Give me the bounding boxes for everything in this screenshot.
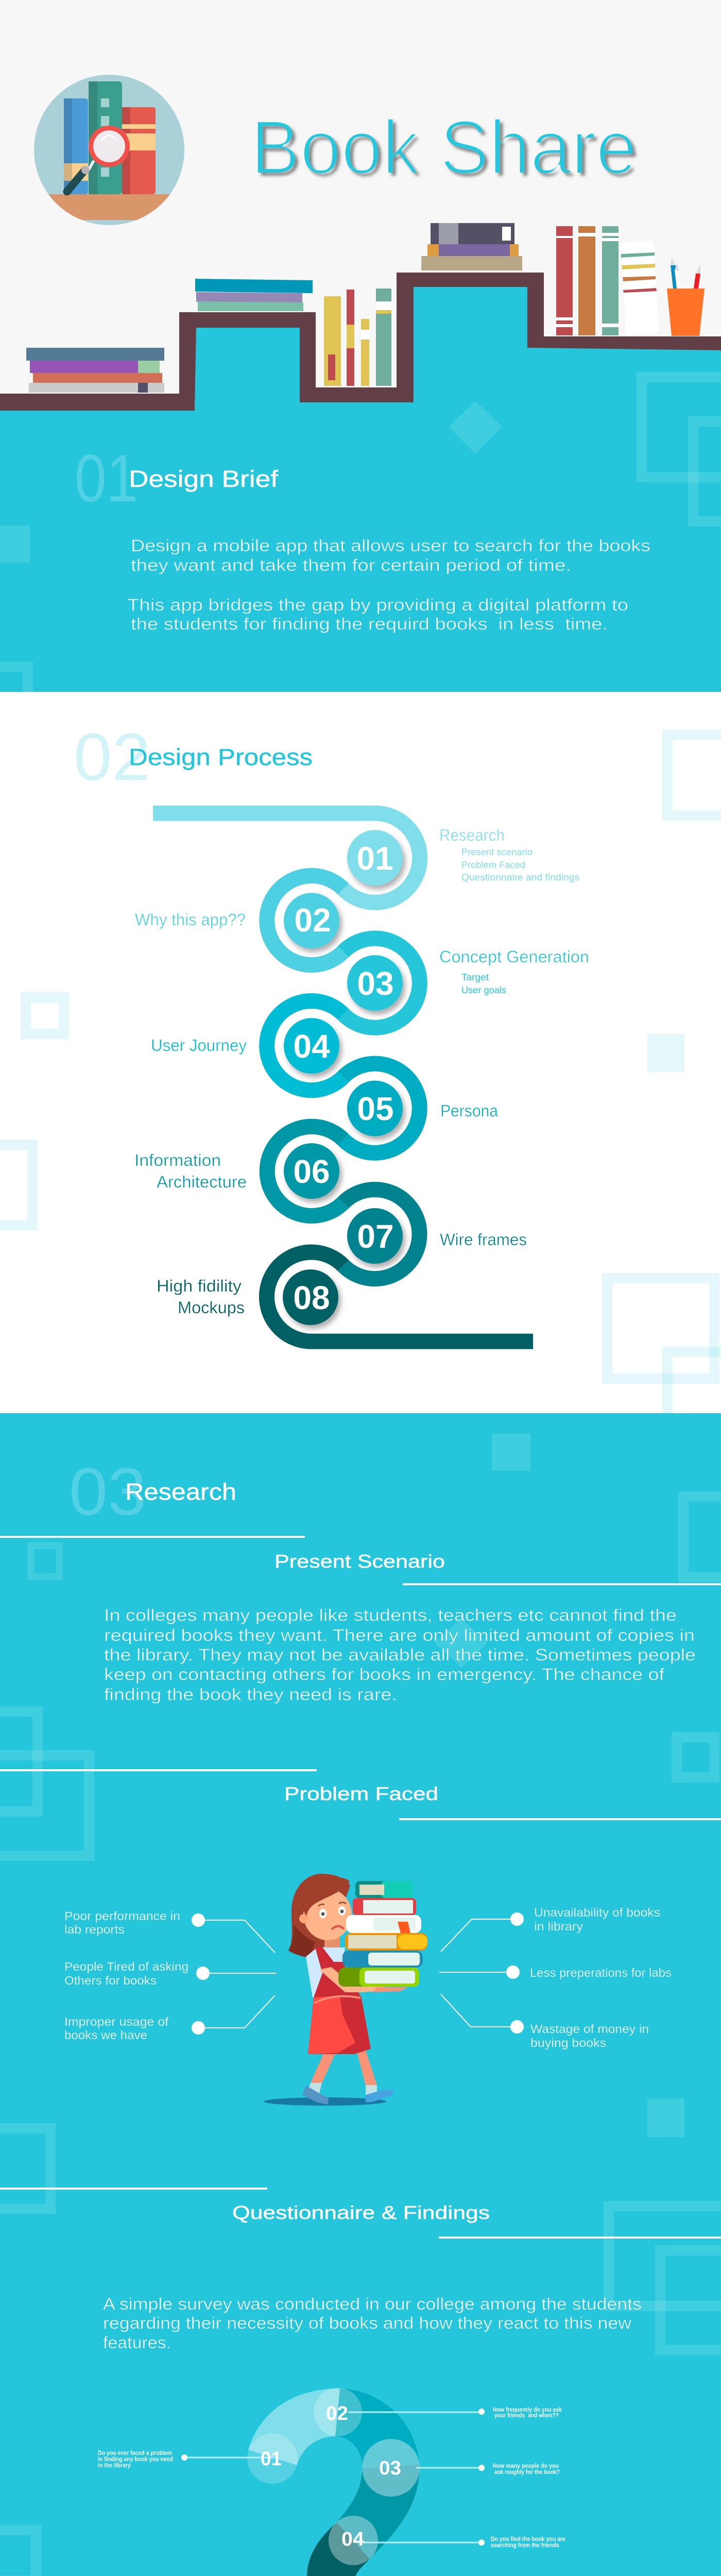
node 03: [347, 955, 403, 1011]
callout: poor performance: lab reports: [64, 1923, 125, 1936]
subheading: problem faced: [0, 1769, 721, 1820]
title: Book Share: [251, 105, 637, 190]
question 01: in the library: [98, 2462, 131, 2469]
callout: people tired: People Tired of asking: [64, 1960, 188, 1973]
icon: stacked books top: [421, 223, 522, 270]
text block: survey: features.: [103, 2333, 171, 2352]
chart: question mark: [181, 2388, 485, 2576]
callout: unavailability: Unavailability of books: [534, 1906, 660, 1919]
node 06: 06: [293, 1153, 330, 1190]
question 03: [493, 2462, 560, 2476]
node 07: 07: [357, 1218, 394, 1255]
heading: design process: Design Process: [129, 744, 313, 770]
question 02: How frequently do you ask: [493, 2406, 562, 2413]
node 06: [284, 1143, 339, 1199]
question 02: your friends and when??: [494, 2412, 559, 2419]
label: persona: Persona: [440, 1101, 498, 1120]
label: concept generation: Concept Generation: [439, 947, 589, 966]
chart: question mark: 03: [379, 2458, 401, 2479]
panel: research: [0, 1413, 721, 2576]
subheading: questionnaire and findings: [0, 2188, 721, 2239]
heading: design brief: Design Brief: [129, 466, 279, 492]
label: concept generation: Target: [461, 972, 489, 982]
callout: improper usage: books we have: [64, 2028, 147, 2042]
callout: poor performance: [64, 1909, 275, 1953]
panel: header: [26, 75, 705, 393]
icon: upright books: [324, 289, 391, 386]
node 04: 04: [293, 1028, 330, 1065]
question 03: ask roughly for the book?: [494, 2468, 560, 2476]
callout: improper usage: Improper usage of: [64, 2015, 169, 2028]
node 08: [283, 1269, 338, 1325]
subheading: present scenario: [0, 1536, 721, 1585]
text block: present scenario: keep on contacting others for books in emergency. The chance of: [104, 1665, 664, 1684]
panel: design brief: [0, 273, 721, 692]
callout: people tired: Others for books: [64, 1974, 157, 1987]
text block: present scenario: required books they want. There are only limited amount of copies in: [104, 1626, 695, 1645]
question 04: Do you find the book you are: [491, 2535, 565, 2543]
text block: survey: [103, 2295, 642, 2352]
section number 01: 01: [75, 440, 138, 516]
callout: unavailability: [441, 1906, 660, 1952]
text block: survey: regarding their necessity of books and how they react to this new: [103, 2314, 632, 2332]
text block: brief: the students for finding the requird books in less time.: [131, 615, 608, 633]
callout: poor performance: Poor performance in: [64, 1909, 180, 1923]
label: high fidility mockups: High fidility: [157, 1277, 242, 1295]
label: research: Research: [439, 826, 505, 844]
text block: present scenario: In colleges many people like students, teachers etc cannot find the: [104, 1606, 677, 1624]
chart: snake timeline: [153, 813, 533, 1342]
label: high fidility mockups: [157, 1277, 245, 1317]
callout: wastage of money: buying books: [530, 2036, 606, 2049]
callout: less preparations: Less preperations for labs: [530, 1966, 672, 1979]
node 05: [347, 1081, 403, 1137]
label: research: [439, 826, 579, 883]
icon: stacked books middle: [195, 279, 313, 311]
callout: wastage of money: [441, 1994, 649, 2049]
icon: shelf: [0, 273, 721, 411]
question 04: searching from the friends: [491, 2541, 559, 2549]
text block: present scenario: finding the book they need is rare.: [104, 1685, 397, 1704]
question 04: [491, 2535, 565, 2549]
text block: brief: [127, 536, 650, 633]
label: information architecture: Architecture: [157, 1173, 247, 1191]
icon: books and pencil cup right: [556, 226, 705, 336]
section number 02: 02: [74, 719, 150, 794]
question 01: in finding any book you need: [98, 2455, 173, 2463]
callout: improper usage: [64, 1995, 275, 2042]
icon: stacked books left: [26, 348, 164, 393]
text block: present scenario: [104, 1606, 696, 1704]
question 01: Do you ever faced a problem: [98, 2449, 172, 2456]
label: concept generation: [439, 947, 589, 995]
subheading: questionnaire and findings: Questionnaire & Findings: [232, 2202, 490, 2223]
panel: design process: [0, 692, 721, 1413]
callout: wastage of money: Wastage of money in: [530, 2022, 649, 2036]
node 01: 01: [356, 840, 393, 877]
node 01: [347, 830, 403, 886]
icon: book logo: [34, 75, 184, 225]
question 01: [98, 2449, 173, 2469]
label: why this app: Why this app??: [135, 910, 246, 929]
text block: survey: A simple survey was conducted in our college among the students: [103, 2295, 642, 2313]
callout: people tired: [64, 1960, 277, 1987]
question 03: How many people do you: [493, 2462, 559, 2469]
text block: present scenario: the library. They may not be available all the time. Sometimes people: [104, 1646, 696, 1664]
heading: research: Research: [125, 1479, 236, 1505]
node 08: 08: [293, 1279, 330, 1316]
text block: brief: they want and take them for certain period of time.: [131, 556, 571, 574]
node 05: 05: [357, 1090, 394, 1127]
label: user journey: User Journey: [151, 1036, 247, 1055]
illustration: girl carrying books: [264, 1874, 427, 2106]
node 03: 03: [357, 965, 394, 1002]
subheading: problem faced: Problem Faced: [284, 1783, 438, 1804]
node 02: 02: [294, 902, 331, 939]
chart: question mark: 02: [326, 2403, 348, 2425]
label: concept generation: User goals: [461, 985, 506, 995]
label: research: Problem Faced: [461, 860, 525, 870]
node 04: [284, 1018, 339, 1074]
label: research: Present scenario: [461, 847, 533, 857]
callout: less preparations: [439, 1965, 672, 1979]
chart: question mark: 04: [341, 2529, 364, 2550]
node 02: [284, 893, 339, 948]
text block: brief: This app bridges the gap by providing a digital platform to: [127, 596, 628, 614]
subheading: present scenario: Present Scenario: [274, 1551, 445, 1572]
node 07: [347, 1208, 403, 1264]
callout: unavailability: in library: [534, 1920, 583, 1933]
chart: question mark: 01: [261, 2448, 282, 2470]
label: wire frames: Wire frames: [440, 1230, 527, 1249]
label: information architecture: Information: [134, 1151, 221, 1170]
label: research: Questionnaire and findings: [461, 872, 579, 883]
section number 03: 03: [69, 1454, 146, 1529]
label: information architecture: [134, 1151, 247, 1191]
text block: brief: Design a mobile app that allows user to search for the books: [131, 536, 650, 555]
question 02: [493, 2406, 562, 2419]
label: high fidility mockups: Mockups: [178, 1298, 245, 1317]
